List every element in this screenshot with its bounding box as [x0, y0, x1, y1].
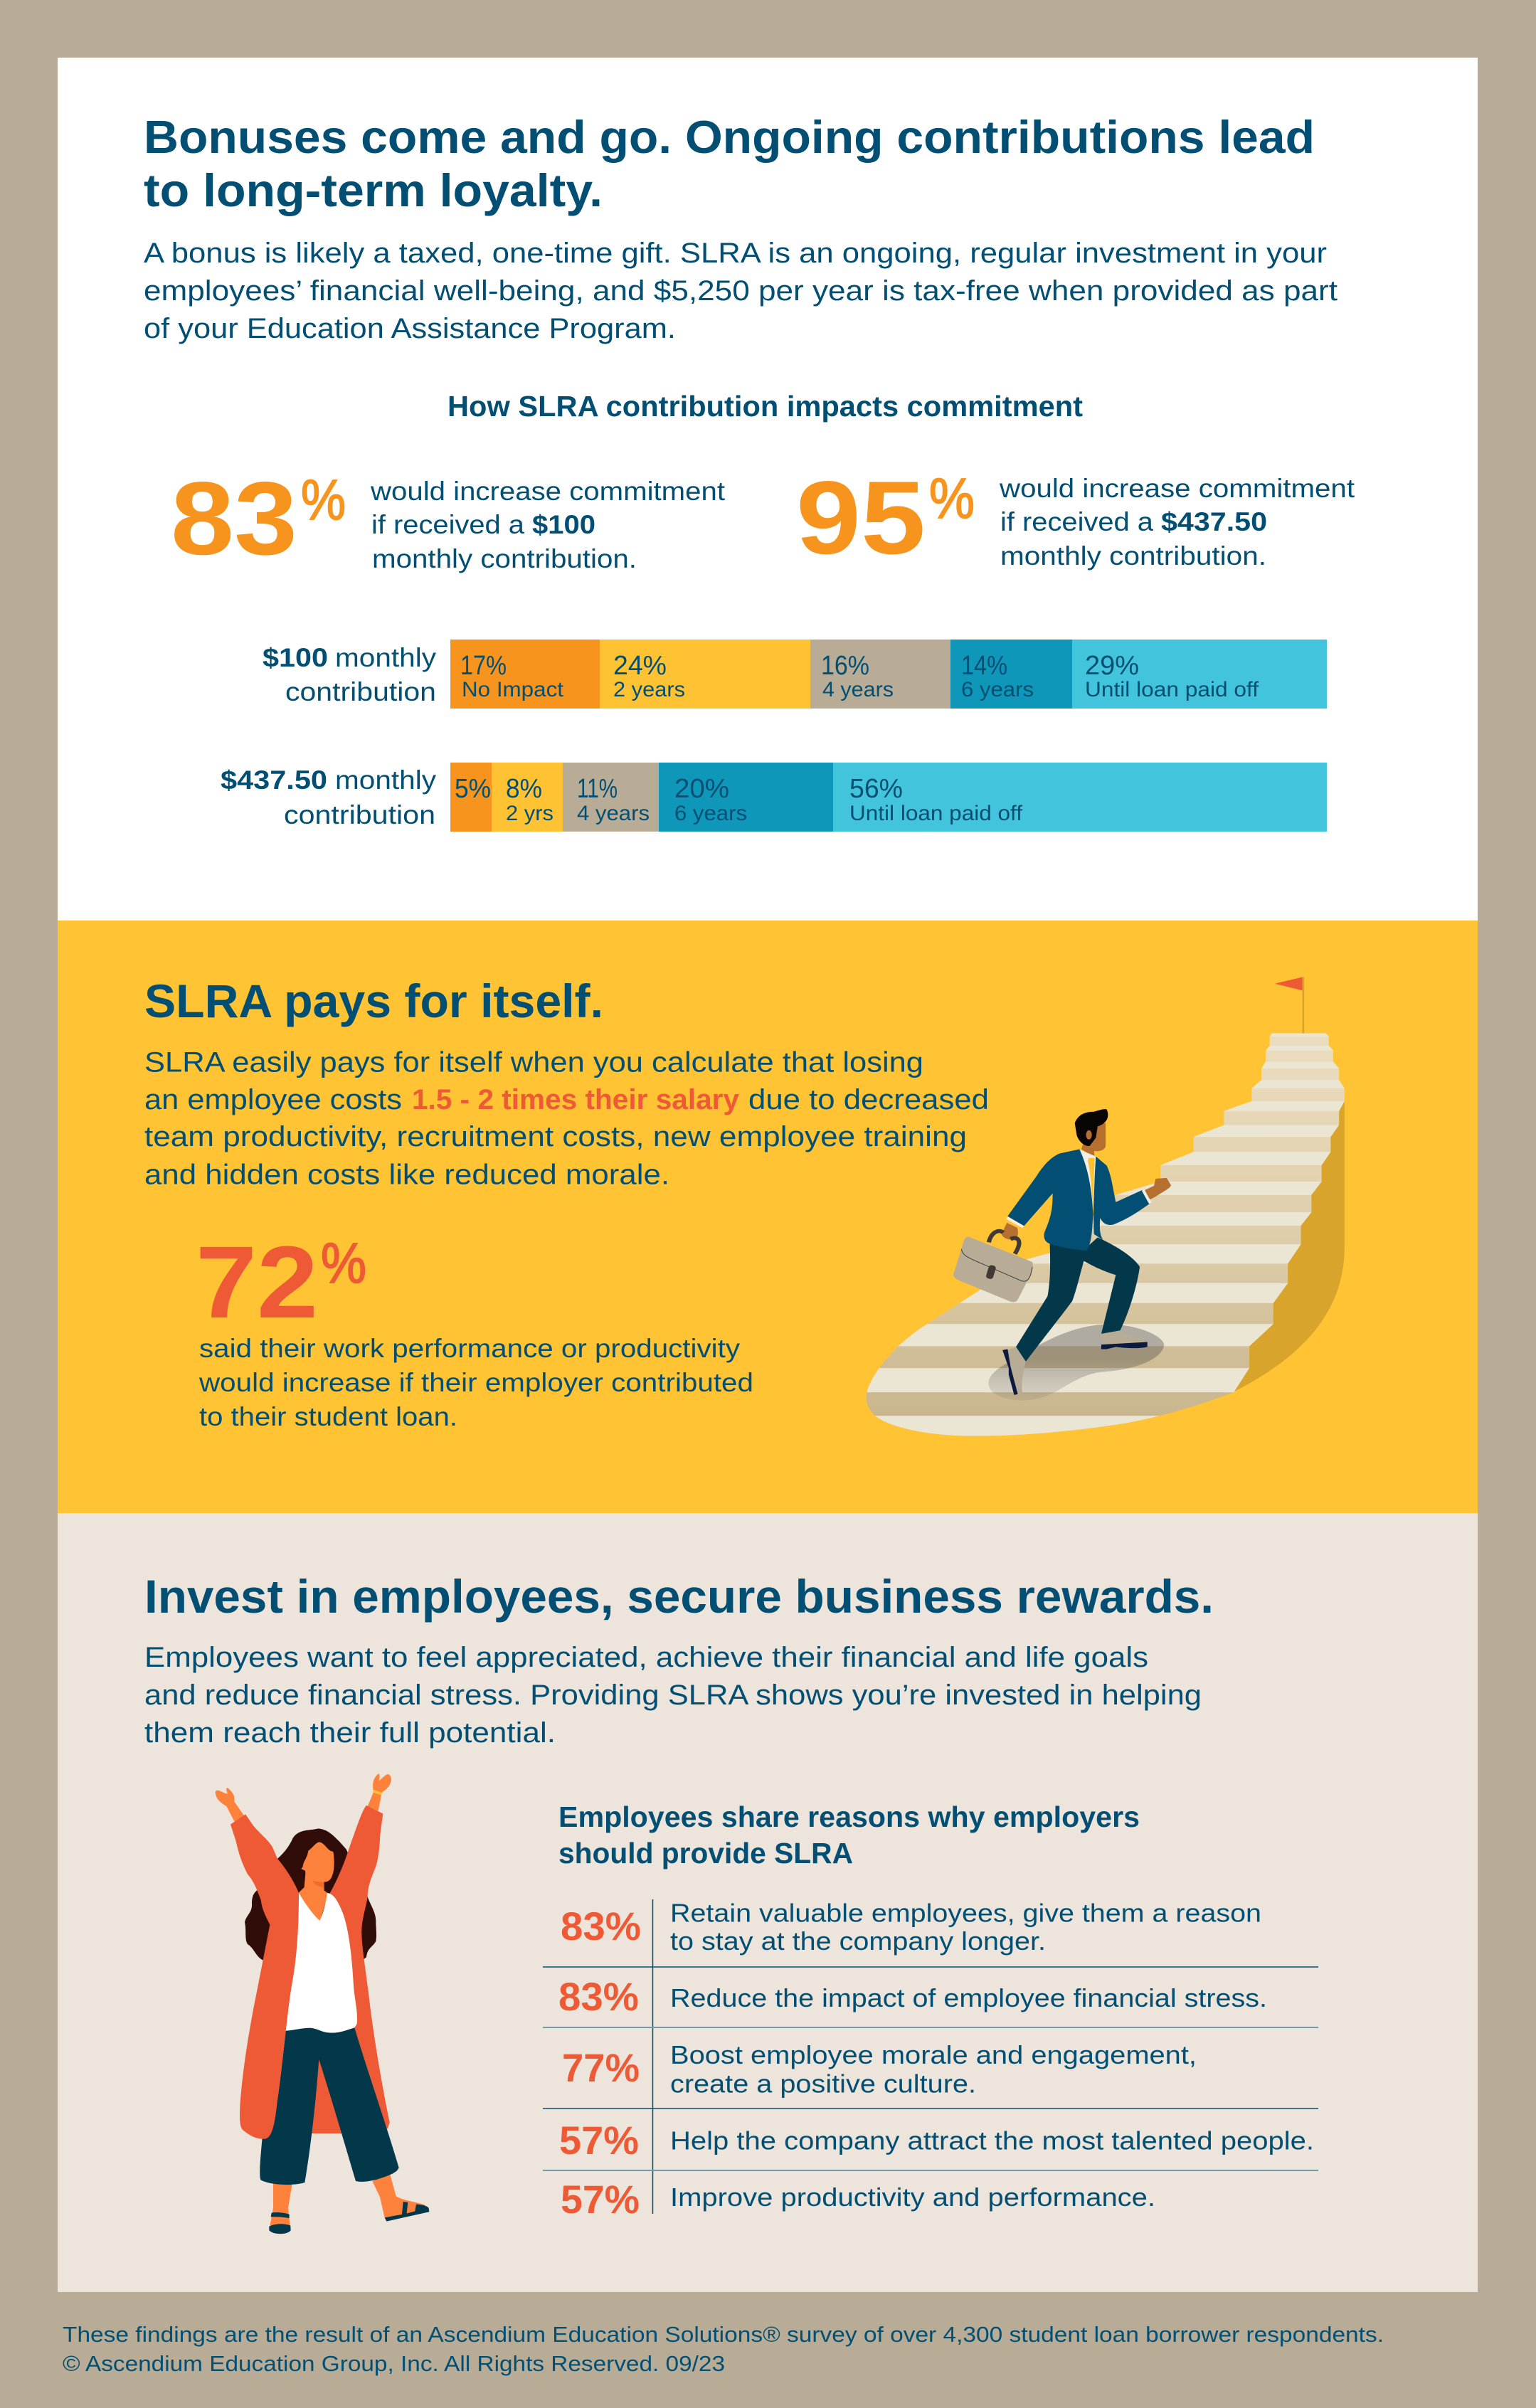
stat: 83 percent: %: [301, 468, 346, 531]
footer note: [63, 2322, 1384, 2376]
body text: 1.5 - 2 times their salary: [412, 1084, 740, 1115]
panel: SLRA pays for itself: [58, 921, 1478, 1513]
bar chart: 100 dollar contribution: Until loan paid off: [1085, 678, 1259, 701]
panel: commitment: [58, 58, 1478, 921]
bar chart: 437.50 dollar contribution: 4 years: [577, 802, 650, 825]
row: 77 percent morale: 77%: [562, 2045, 640, 2090]
bar chart: 100 dollar contribution: 29%: [1085, 651, 1139, 681]
footer note: © Ascendium Education Group, Inc. All Rights Reserved. 09/23: [63, 2351, 725, 2376]
intro text: of your Education Assistance Program.: [144, 313, 676, 344]
row: 57 percent talent: [559, 2118, 1314, 2163]
stat: 83 percent: would increase commitment: [370, 477, 726, 506]
bar chart: 437.50 dollar contribution: 11%: [577, 774, 618, 804]
heading: bonuses: [144, 111, 1315, 216]
row: 83 percent retain: to stay at the company longer.: [670, 1926, 1046, 1956]
bar chart: 437.50 dollar contribution: Until loan paid off: [849, 802, 1023, 825]
bar chart: 437.50 dollar contribution: 8%: [506, 774, 542, 804]
body text: and reduce financial stress. Providing SLRA shows you’re invested in helping: [144, 1680, 1202, 1711]
intro text: A bonus is likely a taxed, one-time gift. SLRA is an ongoing, regular investment in your: [144, 238, 1327, 269]
body text: [144, 1642, 1202, 1749]
body text: an employee costs: [144, 1084, 402, 1115]
body text: due to decreased: [748, 1084, 989, 1115]
illustration: woman with arms raised: [216, 1773, 429, 2234]
list heading: Employees share reasons why employers: [558, 1800, 1140, 1833]
stat: 72 percent: 72: [196, 1225, 318, 1340]
bar chart: 437.50 dollar contribution: contribution: [284, 800, 435, 829]
row: 77 percent morale: [562, 2040, 1197, 2099]
heading: pays for itself: SLRA pays for itself.: [144, 975, 603, 1027]
stat: 95 percent: would increase commitment: [999, 474, 1355, 503]
bar chart: 437.50 dollar contribution: 5%: [455, 774, 491, 804]
body text: them reach their full potential.: [144, 1717, 556, 1749]
body text: and hidden costs like reduced morale.: [144, 1160, 669, 1191]
row: 57 percent talent: 57%: [559, 2118, 639, 2163]
row: 57 percent productivity: Improve productivity and performance.: [670, 2182, 1155, 2212]
bar chart: 100 dollar contribution: $100: [263, 643, 328, 672]
footer note: These findings are the result of an Ascendium Education Solutions® survey of over 4,300 student loan borrower respondents.: [63, 2322, 1384, 2347]
row: 57 percent talent: Help the company attract the most talented people.: [670, 2126, 1314, 2155]
row: 77 percent morale: create a positive culture.: [670, 2069, 976, 2099]
stat: 83 percent: $100: [532, 510, 595, 539]
body text: Employees want to feel appreciated, achieve their financial and life goals: [144, 1642, 1148, 1673]
stat: 95 percent: [796, 460, 1355, 576]
panel: invest in employees: [58, 1513, 1478, 2292]
row: 77 percent morale: Boost employee morale and engagement,: [670, 2040, 1197, 2069]
shadow under man: [988, 1325, 1164, 1401]
bar chart: 437.50 dollar contribution: 2 yrs: [506, 802, 554, 825]
row: 83 percent stress: 83%: [558, 1974, 639, 2019]
list heading: should provide SLRA: [558, 1837, 853, 1869]
bar chart: 437.50 dollar contribution: 6 years: [674, 802, 747, 825]
stat: 72 percent: said their work performance or productivity: [199, 1334, 741, 1363]
heading: invest: Invest in employees, secure business rewards.: [144, 1570, 1214, 1623]
man: [953, 1109, 1171, 1395]
bar chart: 100 dollar contribution: 6 years: [961, 678, 1034, 701]
bar chart: 100 dollar contribution: 17%: [460, 651, 507, 681]
stat: 95 percent: 95: [796, 460, 926, 576]
row: 57 percent productivity: 57%: [561, 2177, 640, 2222]
bar chart: 437.50 dollar contribution: monthly: [335, 765, 437, 795]
stat: 83 percent: monthly contribution.: [372, 544, 637, 573]
subheading: How SLRA contribution impacts commitment: [447, 390, 1083, 423]
heading: bonuses: Bonuses come and go. Ongoing contributions lead: [144, 111, 1315, 163]
stat: 72 percent: would increase if their employer contributed: [198, 1368, 753, 1397]
body text: team productivity, recruitment costs, new employee training: [144, 1121, 967, 1152]
bar chart: 100 dollar contribution: monthly: [335, 643, 437, 672]
row: 57 percent productivity: [561, 2177, 1155, 2222]
list heading: [558, 1800, 1140, 1869]
bar chart: 437.50 dollar contribution: $437.50: [221, 765, 327, 795]
stat: 95 percent: if received a: [1000, 507, 1153, 536]
stat: 83 percent: 83: [171, 460, 297, 576]
bar chart: 100 dollar contribution: [263, 640, 1327, 709]
stat: 95 percent: %: [929, 467, 975, 530]
stat: 83 percent: [171, 460, 726, 576]
heading: bonuses: to long-term loyalty.: [144, 164, 603, 216]
row: 83 percent stress: [558, 1974, 1267, 2019]
stairs: [854, 1034, 1362, 1438]
stat: 72 percent: [196, 1225, 753, 1431]
bar chart: 100 dollar contribution: No Impact: [462, 678, 564, 701]
bar chart: 100 dollar contribution: 16%: [821, 651, 869, 681]
bar chart: 100 dollar contribution: 4 years: [822, 678, 894, 701]
icon: briefcase: [953, 1231, 1033, 1302]
bar chart: 100 dollar contribution: contribution: [285, 677, 436, 706]
bar chart: 437.50 dollar contribution: [221, 763, 1327, 832]
stat: 83 percent: if received a: [371, 510, 524, 539]
bar chart: 100 dollar contribution: 24%: [613, 651, 667, 681]
bar chart: 100 dollar contribution: 2 years: [613, 678, 685, 701]
stat: 72 percent: %: [321, 1231, 366, 1295]
illustration: man climbing stairs: [854, 977, 1362, 1438]
body text: [144, 1047, 989, 1191]
intro text: [144, 238, 1338, 344]
stat: 72 percent: to their student loan.: [199, 1402, 457, 1431]
stat: 95 percent: monthly contribution.: [1000, 541, 1266, 571]
row: 83 percent retain: [561, 1898, 1261, 1956]
row: 83 percent stress: Reduce the impact of employee financial stress.: [670, 1983, 1267, 2012]
icon: flag: [1275, 977, 1304, 1034]
row: 83 percent retain: Retain valuable employees, give them a reason: [670, 1898, 1261, 1928]
row: 83 percent retain: 83%: [561, 1904, 641, 1948]
stat: 95 percent: $437.50: [1161, 507, 1267, 536]
table: reasons to provide SLRA: [543, 1898, 1318, 2222]
intro text: employees’ financial well-being, and $5,250 per year is tax-free when provided as part: [144, 275, 1338, 307]
bar chart: 100 dollar contribution: 14%: [961, 651, 1007, 681]
bar chart: 437.50 dollar contribution: 20%: [674, 774, 729, 804]
body text: SLRA easily pays for itself when you calculate that losing: [144, 1047, 923, 1078]
bar chart: 437.50 dollar contribution: 56%: [849, 774, 903, 804]
